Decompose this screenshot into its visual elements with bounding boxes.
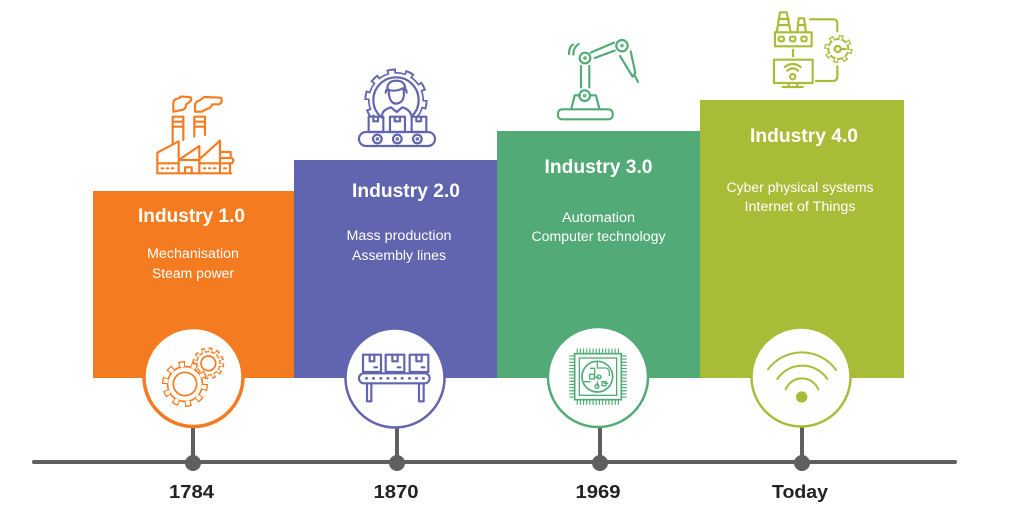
year label: Today: Today: [772, 481, 829, 502]
icon: gears: [165, 350, 222, 404]
panel: Industry 4.0: [700, 100, 904, 378]
text: Industry 2.0 description: Mass production: [346, 228, 452, 243]
text: Industry 1.0 description: [147, 246, 239, 281]
heading: Industry 4.0: Industry 4.0: [750, 125, 858, 147]
timeline axis: [32, 460, 957, 464]
circle: chip badge: [548, 327, 648, 427]
text: Industry 4.0 description: [726, 180, 874, 214]
icon: smart factory network: [774, 12, 850, 87]
circle: wifi badge: [752, 328, 850, 426]
icon: factory: [157, 96, 233, 173]
text: Industry 1.0 description: Steam power: [152, 266, 235, 281]
icon: worker in gear on conveyor: [359, 72, 435, 146]
stem and node: 1969: [592, 426, 608, 471]
text: Industry 4.0 description: Internet of Things: [744, 199, 856, 214]
text: Industry 2.0 description: [346, 228, 452, 263]
year label: 1870: 1870: [374, 481, 418, 502]
icon: conveyor belt: [359, 355, 430, 401]
heading: Industry 3.0: Industry 3.0: [544, 156, 653, 178]
stem and node: 1870: [389, 426, 405, 471]
text: Industry 3.0 description: Automation: [562, 210, 635, 225]
text: Industry 3.0 description: Computer technology: [532, 229, 666, 244]
panel: Industry 3.0: [497, 131, 700, 378]
year label: 1784: 1784: [169, 481, 215, 502]
icon: microchip: [572, 351, 624, 402]
panel: Industry 1.0: [93, 191, 295, 378]
year label: 1969: 1969: [576, 481, 620, 502]
circle: conveyor badge: [346, 328, 444, 428]
stem and node: Today: [794, 426, 810, 471]
text: Industry 1.0 description: Mechanisation: [147, 246, 239, 261]
text: Industry 2.0 description: Assembly lines: [352, 248, 446, 263]
heading: Industry 2.0: Industry 2.0: [352, 180, 460, 202]
heading: Industry 1.0: Industry 1.0: [138, 205, 245, 227]
panel: Industry 2.0: [294, 160, 497, 378]
icon: wifi: [768, 352, 836, 403]
stem and node: 1784: [185, 426, 201, 471]
circle: gears badge: [144, 328, 243, 426]
icon: robot arm: [558, 40, 638, 119]
text: Industry 4.0 description: Cyber physical systems: [726, 180, 874, 195]
text: Industry 3.0 description: [532, 210, 666, 244]
